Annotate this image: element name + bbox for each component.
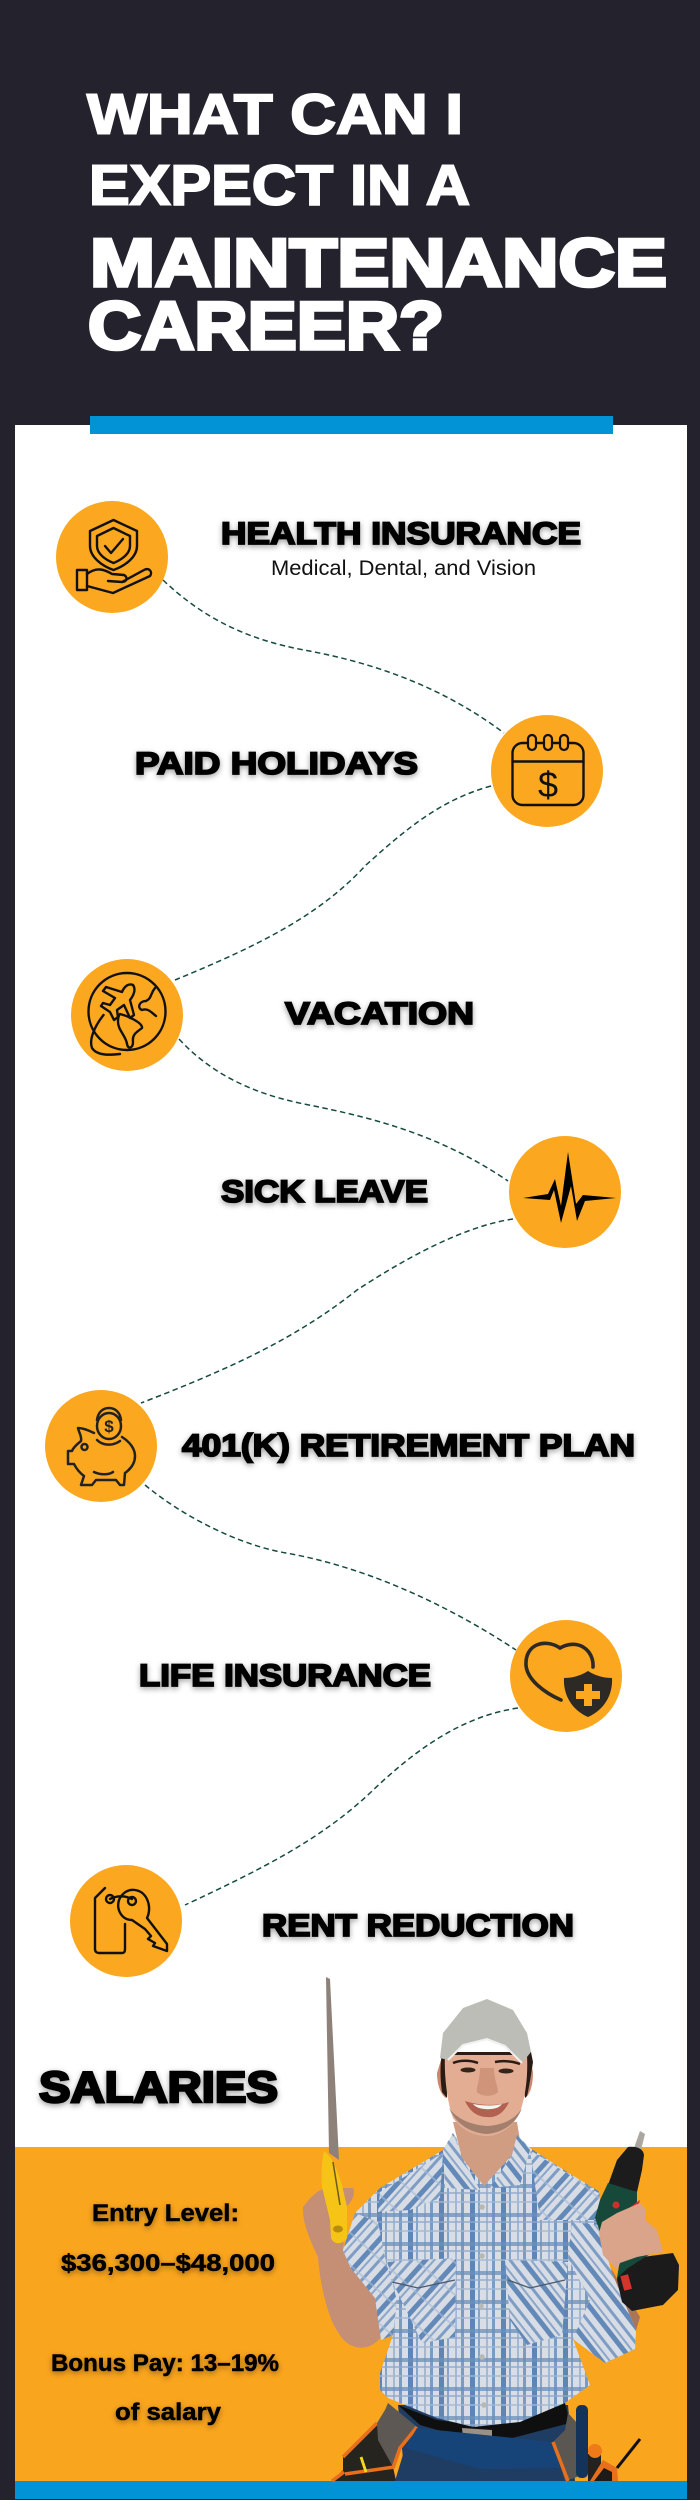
heading: 401(k) retirement plan: 401(K) RETIREMENT PLAN — [182, 1427, 635, 1463]
shirt buttons — [478, 2204, 487, 2408]
sleeves, yoke and pockets — [343, 2150, 636, 2363]
drill — [595, 2131, 679, 2311]
salary details — [51, 2200, 279, 2426]
salary details: $36,300–$48,000 — [61, 2250, 275, 2277]
connector: retirement to life insurance — [145, 1485, 516, 1650]
benefit: paid holidays — [135, 715, 603, 827]
icon: key and tag — [70, 1865, 182, 1977]
white content panel — [15, 425, 687, 2150]
icon: heart with shield — [510, 1620, 622, 1732]
salary details: Entry Level: — [92, 2200, 239, 2227]
benefit: rent reduction — [70, 1865, 574, 1977]
cap — [440, 1999, 531, 2063]
connector: life insurance to rent — [185, 1708, 518, 1905]
title: CAREER? — [88, 288, 444, 364]
right tool pouch — [553, 2405, 640, 2481]
heading: rent reduction: RENT REDUCTION — [262, 1907, 574, 1943]
blue footer bar — [15, 2481, 687, 2499]
heading: salaries: SALARIES — [39, 2063, 278, 2112]
head and face — [437, 2052, 533, 2136]
blue accent bar — [90, 416, 613, 434]
connector: holidays to vacation — [175, 786, 491, 980]
title: MAINTENANCE — [90, 225, 667, 301]
title: WHAT CAN I — [87, 82, 463, 146]
icon: pulse line — [509, 1136, 621, 1248]
left forearm — [303, 2188, 381, 2348]
heading: life insurance: LIFE INSURANCE — [139, 1657, 431, 1693]
jeans pocket area — [395, 2448, 563, 2481]
heading: sick leave: SICK LEAVE — [221, 1173, 428, 1209]
heading: health insurance: HEALTH INSURANCE — [221, 515, 581, 551]
icon: globe with plane — [71, 959, 183, 1071]
heading: vacation: VACATION — [285, 995, 474, 1031]
left tool pouch — [332, 2403, 417, 2481]
benefit: retirement plan — [45, 1390, 635, 1502]
benefit: sick leave — [221, 1136, 621, 1248]
connector: health to holidays — [163, 580, 504, 733]
neck — [453, 2122, 520, 2186]
orange salary band — [15, 2147, 687, 2481]
benefit: life insurance — [139, 1620, 622, 1732]
icon: calendar with dollar — [491, 715, 603, 827]
heading: paid holidays: PAID HOLIDAYS — [135, 745, 418, 781]
blue apron strap — [405, 2428, 560, 2469]
icon: shield in hand — [56, 501, 168, 613]
benefit: health insurance — [56, 501, 581, 613]
shirt — [343, 2133, 636, 2427]
hand on drill — [599, 2203, 663, 2270]
salary details: of salary — [115, 2399, 221, 2426]
belt with buckle — [398, 2403, 570, 2443]
title: EXPECT IN A — [89, 154, 470, 218]
jeans — [398, 2405, 575, 2481]
salary details: Bonus Pay: 13–19% — [51, 2350, 279, 2377]
connector: vacation to sick leave — [179, 1039, 508, 1181]
connector: sick leave to retirement — [141, 1219, 513, 1403]
benefit: vacation — [71, 959, 474, 1071]
right forearm — [575, 2270, 640, 2360]
collar — [443, 2133, 530, 2190]
title — [87, 82, 667, 364]
icon: calendar with dollar: $ — [538, 764, 558, 805]
subheading: Medical, Dental, and Vision — [271, 557, 536, 580]
icon: piggy bank with coin — [45, 1390, 157, 1502]
icon: piggy bank with coin: $ — [104, 1417, 114, 1436]
photo illustration: smiling worker with saw and drill — [303, 1977, 679, 2481]
saw — [322, 1977, 347, 2243]
